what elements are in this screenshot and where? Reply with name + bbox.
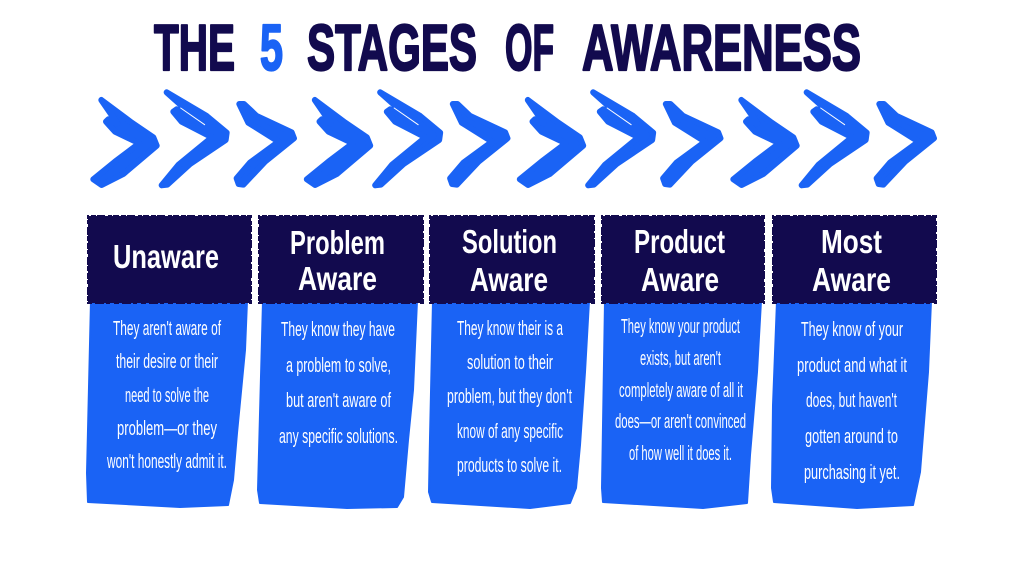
body card: most aware: gotten around to (805, 426, 898, 448)
header: most aware: Aware (812, 261, 891, 298)
body card: problem aware: They know they have (281, 319, 395, 341)
body card: most aware (772, 301, 931, 508)
header: problem aware: Problem (290, 224, 385, 261)
header: unaware: Unaware (113, 238, 219, 275)
body card: solution aware: solution to their (467, 352, 553, 374)
body card: unaware: need to solve the (125, 385, 209, 407)
title: 5 (260, 11, 283, 84)
header: most aware (772, 215, 937, 303)
panel: product aware (601, 215, 765, 508)
body card: solution aware (429, 301, 589, 508)
body card: problem aware: a problem to solve, (286, 355, 391, 377)
header: most aware: Most (821, 223, 882, 260)
body card: problem aware: any specific solutions. (279, 426, 398, 448)
title: OF (505, 11, 554, 84)
body card: most aware: They know of your (801, 319, 903, 341)
header: solution aware (429, 215, 595, 303)
header: unaware (87, 215, 252, 303)
body card: solution aware: know of any specific (457, 421, 563, 443)
title: AWARENESS (582, 11, 861, 84)
body card: unaware: their desire or their (116, 351, 218, 373)
body card: solution aware: They know their is a (457, 318, 564, 340)
body card: unaware (87, 301, 247, 507)
body card: product aware: of how well it does it. (629, 443, 732, 465)
body card: unaware: problem—or they (117, 418, 217, 440)
header: solution aware: Aware (470, 261, 548, 298)
body card: product aware: exists, but aren't (640, 348, 721, 370)
body card: most aware: purchasing it yet. (804, 462, 900, 484)
header: solution aware: Solution (462, 223, 557, 260)
header: problem aware (258, 215, 424, 303)
body card: solution aware: problem, but they don't (447, 386, 572, 408)
title: STAGES (307, 11, 477, 84)
body card: product aware: They know your product (621, 316, 740, 338)
body card: most aware: does, but haven't (806, 390, 897, 412)
header: product aware: Aware (641, 261, 719, 298)
body card: solution aware: products to solve it. (457, 455, 562, 477)
panel: solution aware (429, 215, 595, 508)
body card: unaware: won't honestly admit it. (106, 451, 227, 473)
header: product aware: Product (634, 223, 725, 260)
body card: problem aware: but aren't aware of (286, 390, 391, 412)
body card: product aware (602, 301, 761, 508)
chevron arrow row (93, 92, 934, 185)
title (154, 11, 861, 84)
body card: most aware: product and what it (797, 355, 907, 377)
body card: unaware: They aren't aware of (113, 318, 221, 340)
panel: unaware (87, 215, 252, 507)
title: THE (154, 11, 235, 84)
body card: product aware: does—or aren't convinced (615, 411, 746, 433)
panel: most aware (772, 215, 937, 508)
body card: product aware: completely aware of all it (619, 380, 743, 402)
panel: problem aware (258, 215, 424, 508)
body card: problem aware (258, 301, 417, 508)
header: problem aware: Aware (298, 260, 377, 297)
header: product aware (601, 215, 765, 303)
